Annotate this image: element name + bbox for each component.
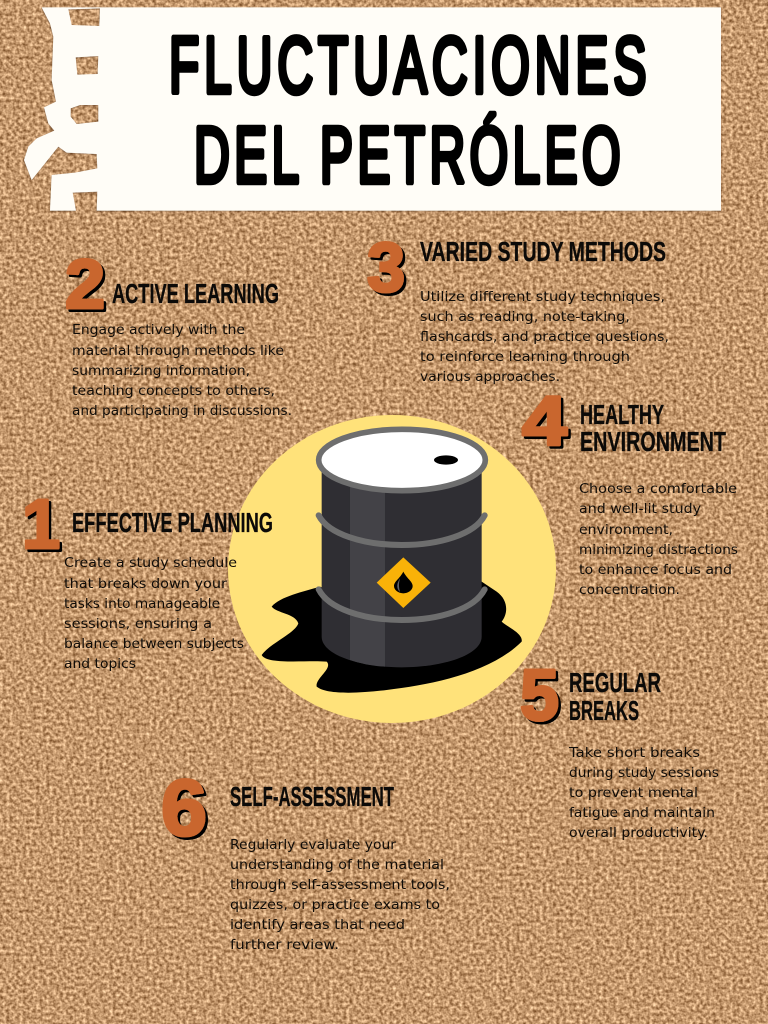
central illustration: oil barrel <box>228 415 556 723</box>
number 3: 3 <box>367 228 405 306</box>
heading: ACTIVE LEARNING <box>112 278 279 309</box>
body text: quizzes, or practice exams to <box>230 897 440 913</box>
barrel body <box>322 460 482 667</box>
body text: balance between subjects <box>64 636 244 652</box>
body text: minimizing distractions <box>579 542 738 558</box>
title banner <box>24 7 721 211</box>
body text: to prevent mental <box>569 785 698 801</box>
title text: FLUCTUACIONES <box>169 22 646 111</box>
body text: Take short breaks <box>568 745 700 761</box>
body text: sessions, ensuring a <box>64 616 212 632</box>
body text: Regularly evaluate your <box>230 837 396 853</box>
panel: 4 healthy environment <box>522 382 738 598</box>
panel: 3 varied study methods <box>367 228 669 385</box>
body text: summarizing information, <box>72 363 250 379</box>
body text: teaching concepts to others, <box>72 383 275 399</box>
heading: HEALTHY <box>580 399 664 430</box>
body text <box>230 837 450 953</box>
body text: and well-lit study <box>579 501 701 517</box>
body text: further review. <box>230 937 339 953</box>
body text: Choose a comfortable <box>579 481 737 497</box>
body text: identify areas that need <box>230 917 405 933</box>
body text: material through methods like <box>72 343 284 359</box>
heading <box>580 399 726 457</box>
heading <box>569 667 661 726</box>
panel: 2 active learning <box>65 245 292 419</box>
yellow circle <box>228 415 556 723</box>
body text: during study sessions <box>569 765 719 781</box>
oil spill <box>262 582 522 693</box>
warning diamond <box>377 557 431 608</box>
body text: that breaks down your <box>64 576 227 592</box>
lid opening <box>434 455 458 465</box>
body text: understanding of the material <box>230 857 444 873</box>
number 2: 2 <box>65 245 105 323</box>
torn notebook paper <box>24 7 721 211</box>
body text <box>579 481 738 598</box>
body text: to enhance focus and <box>579 562 732 578</box>
body text: concentration. <box>579 582 680 598</box>
barrel lid <box>319 429 485 491</box>
body text: various approaches. <box>420 369 560 385</box>
barrel and spill <box>262 429 522 693</box>
body text: through self-assessment tools, <box>230 877 450 893</box>
heading: EFFECTIVE PLANNING <box>72 507 273 538</box>
body text: Create a study schedule <box>64 555 237 571</box>
body text <box>420 289 669 385</box>
panel: 5 regular breaks <box>520 656 719 841</box>
body text: environment, <box>579 522 673 538</box>
panel: 6 self-assessment <box>161 763 450 953</box>
number 1: 1 <box>22 485 60 563</box>
body text: to reinforce learning through <box>420 349 630 365</box>
barrel highlight <box>350 477 385 667</box>
body text <box>64 555 244 672</box>
lower band <box>319 589 485 620</box>
body text: and participating in discussions. <box>72 403 292 419</box>
title text <box>169 22 646 201</box>
body text: Utilize different study techniques, <box>420 289 665 305</box>
body text: and topics <box>64 656 136 672</box>
body text: flashcards, and practice questions, <box>420 329 669 345</box>
body text <box>72 322 292 419</box>
oil drop <box>394 572 413 593</box>
upper band <box>319 515 485 545</box>
heading: BREAKS <box>569 695 639 726</box>
body text: Engage actively with the <box>72 322 245 338</box>
heading: SELF-ASSESSMENT <box>230 781 394 812</box>
body text: overall productivity. <box>569 825 708 841</box>
body text <box>568 745 719 841</box>
body text: fatigue and maintain <box>569 805 715 821</box>
heading: REGULAR <box>569 667 661 698</box>
number 5: 5 <box>520 656 559 736</box>
number 6: 6 <box>161 763 207 852</box>
body text: such as reading, note-taking, <box>420 309 630 325</box>
panel: 1 effective planning <box>22 485 273 672</box>
heading: VARIED STUDY METHODS <box>420 236 666 267</box>
body text: tasks into manageable <box>64 596 220 612</box>
title text: DEL PETRÓLEO <box>194 112 621 201</box>
number 4: 4 <box>522 382 567 460</box>
